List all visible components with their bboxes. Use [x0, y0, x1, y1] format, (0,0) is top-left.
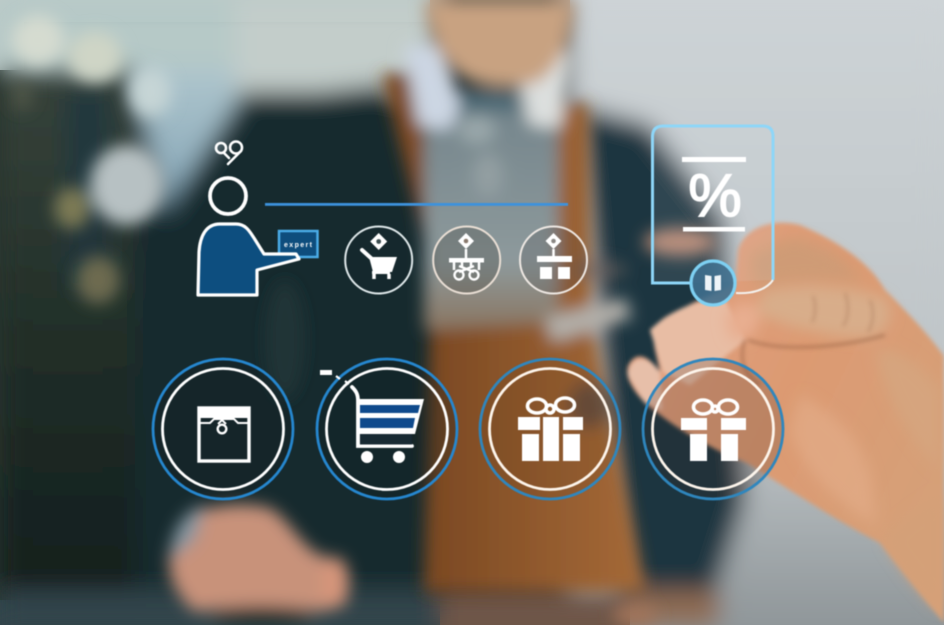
- small icon: basket: [345, 226, 412, 294]
- blurred figure: [10, 0, 716, 625]
- knuckle creases: [742, 293, 885, 385]
- large icon: shopping cart: [317, 359, 457, 499]
- coupon button: [691, 261, 735, 305]
- hand: [627, 223, 944, 623]
- large icon: box: [153, 359, 293, 499]
- connector line: [265, 203, 568, 206]
- small icon: gift: [520, 226, 587, 294]
- icon: person with card: [198, 178, 318, 295]
- card: expert: [284, 242, 313, 249]
- icon: heart above person: [216, 142, 242, 164]
- hand shading: [725, 238, 940, 610]
- large icon: gift over hand: [643, 359, 783, 499]
- discount coupon panel: [652, 126, 773, 305]
- coupon rule top: [682, 157, 746, 162]
- large icon: gift with ribbon: [480, 359, 620, 499]
- coupon rule bottom: [683, 227, 745, 232]
- percent sign: %: [688, 162, 742, 229]
- small icon: bow: [433, 226, 500, 294]
